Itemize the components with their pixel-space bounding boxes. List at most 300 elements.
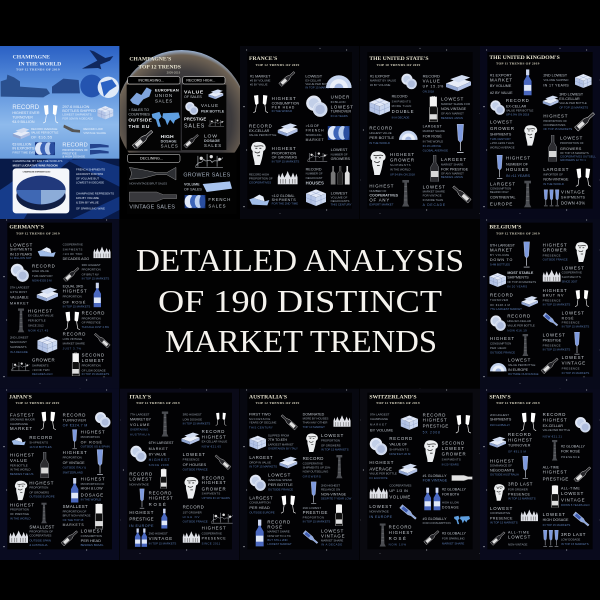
stat: lowest value per bottle: LOWEST: [508, 358, 531, 363]
stat: record highest rose: RECORD: [389, 525, 412, 530]
stat: lowest proportion growers: IN TOP 15 MARKETS: [321, 448, 349, 452]
stat: largest importer: NON-VINTAGE: [543, 177, 569, 181]
panel: italy: [120, 389, 239, 560]
stat: cooperatives: PROPORTION OF: [249, 176, 273, 180]
stat: highest vintage: HIGHEST: [63, 450, 88, 455]
trend: european union sales: [130, 87, 179, 105]
stat: #2 globally: FOR BOTH: [442, 493, 460, 497]
stat: highest cooperative: PRESENCE: [202, 537, 226, 541]
text: champagne exports: 10% BY VOLUME: [76, 196, 99, 200]
stat: highest value: HIGHEST: [10, 453, 35, 458]
panel: champagne in the world: [0, 46, 119, 220]
stat: highest growers: IN TOP 15 MARKETS: [272, 159, 299, 163]
stat: cooperatives up: [370, 484, 412, 500]
trend: low dosage: DOSAGE: [204, 139, 220, 143]
stat: equal 3rd highest: IN TOP 15 MARKETS: [63, 304, 90, 308]
stat: largest consumption: OUTSIDE EUROPE: [249, 511, 275, 515]
stat: lowest consumption: CONSUMPTION: [81, 534, 102, 538]
stat: lowest presence: PRESENCE: [183, 457, 200, 461]
stat: highest cooperatives: OF TOP 15 MARKETS: [543, 127, 572, 131]
stat: #1 export: #2 BY VALUE: [490, 91, 513, 95]
stat: 2nd highest reliance: DESPITE 7-YEAR LOW: [321, 497, 352, 501]
stat: lowest growers: GROWERS: [331, 157, 351, 161]
stat: dominated by houses: THAN ANY OTHER: [303, 421, 327, 425]
stat: record highest prestige: RECORD: [423, 412, 446, 417]
heading: switzerland's: TOP 12 TRENDS OF 2019: [376, 401, 420, 405]
stat: smallest brut: BRUT NON-VINTAGE: [63, 513, 91, 517]
stat: 2nd lowest prestige: PRESTIGE: [303, 510, 328, 515]
stat: lowest growers: [307, 147, 351, 161]
headline: detailed analysis: MARKET TRENDS: [165, 323, 437, 359]
stat: record ex-cellar: [490, 98, 534, 117]
stat: lowest shipments: SHIPMENTS: [10, 248, 33, 252]
stat: lowest growers: LOWEST: [560, 135, 583, 140]
stat: #1 market: #3 BY VOLUME: [250, 78, 270, 82]
stat: grower shipments: <1/3 OF TWO: [32, 368, 50, 372]
stat: 6th largest: BY VOLUME: [490, 253, 509, 257]
stat: highest vintage: [63, 449, 103, 475]
stat: highest grower: SHIPMENTS: [390, 163, 411, 167]
heading: spain's: SPAIN'S: [489, 394, 511, 400]
stat: record average value: RECORD AVERAGE: [31, 127, 57, 131]
stat: cooperative shipments: SHIPMENTS: [63, 247, 83, 251]
stat: 2nd lowest negociant: SHIPMENTS: [10, 345, 27, 349]
stat: record shipments: SHIPMENTS: [392, 99, 411, 103]
stat: dominated by houses: TOP 10 MARKET: [303, 425, 325, 429]
stat: exports: [12, 142, 55, 155]
stat: cooperative shipments: [63, 243, 111, 261]
stat: global shipments: SHIPMENTS: [272, 198, 296, 202]
stat: highest average: IN EUROPE: [369, 476, 388, 480]
stat: highest prestige: HIGHEST: [10, 502, 35, 507]
stat: 3rd last grower: IN TOP 15 MARKETS: [508, 497, 536, 501]
stat: smallest cooperatives: [9, 525, 55, 547]
stat: 6th largest: 6TH LARGEST: [490, 243, 516, 247]
stat: lowest growers: OF TOP 15 MARKETS: [560, 151, 589, 155]
stat: largest rose: LARGEST: [423, 125, 442, 129]
panel: japan: [0, 389, 119, 560]
stat: record high value: THIS CENTURY: [32, 274, 53, 278]
stat: 3rd lowest: VALUE PER BOTTLE: [559, 101, 587, 105]
stat: highest consumption: [490, 334, 528, 356]
stat: second lowest: IN TOP 15 MARKETS: [82, 372, 109, 376]
stat: lowest vintage: IN A DECADE: [321, 543, 342, 547]
stat: lowest non-vintage: OF ANY MARKET: [441, 111, 464, 115]
chart: shipments pie: CHAMPAGNE SHIPMENTS 2019: [23, 170, 50, 173]
stat: vintage shipments: [544, 190, 586, 206]
stat: largest rose: FOR ROSÉ: [423, 133, 442, 138]
stat: 7th largest: OVERTAKING: [130, 428, 148, 432]
stat: cooperative shipments: DECADES AGO: [63, 257, 89, 261]
stat: record ex-cellar: VALUE PER BOTTLE: [543, 428, 570, 432]
trend: high dosage: SALES: [161, 144, 179, 149]
stat: second lowest grower: SHIPMENTS: [442, 457, 461, 461]
stat: record high value: HIGH VALUE: [32, 269, 49, 273]
stat: 3rd last low dosage: [543, 530, 589, 546]
stat: highest cooperatives: COOPERATIVES: [369, 193, 399, 197]
stat: lowest average spend: AVERAGE SPEND: [268, 478, 292, 482]
stat: 2nd lowest volume: [543, 74, 592, 88]
stat: fastest growing: FASTEST: [10, 412, 35, 417]
stat: highest prestige: OF PRESTIGE: [10, 512, 29, 516]
trend: value per bottle: [185, 102, 225, 115]
stat: fastest growing: MARKET: [10, 426, 33, 431]
stat: lowest growers: COOPERATIVES OUTSELL: [560, 155, 596, 159]
stat: highest growers: OF GROWERS: [272, 156, 298, 160]
stat: record cooperative: GROWERS: [303, 475, 321, 479]
stat: smallest cooperatives: OUTSIDE SPAIN: [29, 538, 51, 542]
stat: lowest grower: SHIPMENTS: [490, 132, 512, 136]
trend: high dosage: DOSAGE: [161, 140, 177, 144]
stat: 3rd last grower: [494, 482, 536, 501]
stat: lowest cooperative: [543, 265, 585, 284]
stat: largest drop: LARGEST: [249, 455, 273, 460]
stat: cooperatives up: VOLUME: [389, 495, 411, 500]
stat: largest drop: [249, 455, 297, 469]
stat: largest importer: LARGEST: [543, 167, 569, 172]
icon: globe: [80, 75, 119, 98]
stat: record shipments: 14.5 M BOTTLES: [29, 445, 52, 449]
stat: record per bottle: IN THE WORLD: [369, 141, 390, 145]
stat: highest houses: NUMBER OF: [506, 162, 529, 166]
stat: record high value: NOW €303 5 M: [32, 279, 52, 283]
stat: lowest rose: IN TOP 15 MARKETS: [562, 325, 589, 329]
stat: #1 export: MARKET: [490, 78, 513, 83]
stat: highest rose: HIGHEST: [81, 429, 106, 434]
stat: lowest vintage: FOR VINTAGE: [423, 194, 442, 198]
stat: 6th largest: 9.4M BOTTLES: [490, 262, 510, 266]
stat: 9th largest: MARKET: [370, 422, 388, 426]
stat: record per bottle: PER BOTTLE: [369, 135, 394, 140]
stat: #1 globally vintage: [423, 474, 472, 483]
stat: record ex-cellar: EX-CELLAR: [543, 424, 563, 428]
stat: lowest average spend: LOWEST: [268, 473, 291, 478]
stat: lowest non-vintage: BESIDES JAPAN: [441, 116, 463, 120]
stat: highest grower: GROWER: [390, 157, 415, 162]
headline: detailed analysis: DETAILED ANALYSIS: [136, 242, 464, 278]
stat: record cooperative: NOW OUTSELLING: [303, 470, 328, 474]
stat: cooperatives: [249, 171, 298, 185]
heading: champagne in the world: TOP 12 TRENDS OF 2019: [16, 67, 60, 71]
stat: highest grower presence: GROWER: [543, 247, 567, 252]
stat: high low dosage: PROPORTION OF: [81, 482, 105, 486]
stat: cooperatives up: UP 1/3 IN: [389, 489, 408, 493]
stat: largest consumption: CONSUMPTION: [249, 501, 271, 505]
box: increasing: [128, 77, 180, 84]
stat: bottles shipped: BOTTLES SHIPPED: [62, 109, 96, 113]
stat: highest rose: [72, 429, 110, 449]
stat: record turnover: RECORD: [12, 105, 40, 111]
stat: second lowest grower: [424, 440, 466, 466]
stat: #3 consumption: #3 GLOBALLY: [423, 517, 447, 521]
stat: highest houses: IN >11 YEARS: [506, 174, 531, 178]
stat: lowest grower: LOWEST: [490, 119, 513, 124]
stat: lowest vintage: MARKET SHARE: [423, 189, 445, 193]
stat: lowest consumption: BESIDES BRAZIL: [81, 543, 104, 547]
stat: negociant houses: [306, 166, 350, 185]
box: declining: [128, 154, 180, 162]
stat: highest grower presence: PRESENCE: [543, 253, 561, 257]
stat: record turnover: TURNOVER: [12, 116, 33, 120]
trend: european union sales: UNION: [155, 93, 173, 98]
headline: detailed analysis: [136, 242, 464, 359]
stat: record ex-cellar: EX-CELLAR: [249, 129, 270, 133]
stat: lowest negociants: [306, 189, 352, 207]
heading: the united kingdom's: THE UNITED KINGDOM'S: [489, 55, 560, 61]
stat: record lowest: NON-VINTAGE: [129, 482, 149, 486]
stat: record value: SHIPMENTS: [389, 448, 409, 452]
stat: lowest high dosage: IN TOP 15 MARKETS: [543, 523, 570, 527]
icon: cargo ship: [1, 75, 50, 97]
stat: highest vintage: PROPORTION: [63, 455, 82, 459]
stat: 3rd highest brut nv: 3RD HIGHEST: [82, 263, 101, 267]
stat: highest consumption: HIGHEST: [490, 336, 515, 341]
stat: lowest high dosage: HIGH DOSAGE: [543, 518, 569, 522]
stat: lowest average spend: [250, 473, 293, 492]
stat: 2nd highest shipments: [490, 413, 536, 431]
stat: lowest vintage: VINTAGE: [321, 534, 345, 539]
text: lucrative region: [13, 159, 63, 167]
stat: record shipments: MORE THAN: [392, 104, 412, 108]
stat: highest cooperative: SINCE 2011: [202, 542, 221, 546]
stat: largest prestige: LARGEST: [441, 157, 467, 162]
stat: dominated by houses: DOMINATED: [303, 413, 325, 417]
stat: vintage shipments: SHIPMENTS: [561, 196, 586, 200]
stat: #1 market: #1 MARKET: [250, 74, 271, 78]
stat: largest prestige: BESIDES JAPAN: [441, 175, 463, 179]
stat: lowest cooperative: LOWEST: [562, 265, 585, 270]
stat: grower shipments: DECADES AGO: [32, 372, 53, 376]
heading: champagne's: [129, 56, 181, 75]
stat: lowest vintage: [423, 184, 471, 207]
stat: highest value: IN THE WORLD: [10, 468, 31, 472]
stat: lowest vintage: IN MORE THAN: [423, 198, 443, 202]
stat: lowest vintage: LOWEST: [321, 529, 344, 534]
trend: prestige sales: PRESTIGE: [184, 116, 206, 121]
stat: highest brut nv: [543, 288, 589, 307]
stat: all-time lowest non-vintage: NON-VINTAGE: [508, 542, 528, 546]
stat: #3 consumption: [423, 516, 470, 525]
stat: largest importer: IN THE WORLD: [543, 182, 564, 186]
stat: 2nd highest vintage: 2ND HIGHEST: [149, 531, 168, 535]
stat: lowest growers: [549, 135, 596, 162]
stat: record turnover: €4.9 BILLION: [12, 120, 35, 124]
stat: record high ex-cellar: RECORD: [507, 314, 531, 319]
stat: record value: [423, 74, 471, 93]
stat: largest prestige: MARKET SHARE: [441, 162, 463, 166]
heading: japan's: JAPAN'S: [9, 394, 32, 400]
stat: highest cooperative: COOPERATIVE: [202, 531, 222, 535]
stat: record grower: GROWER: [202, 486, 226, 491]
stat: lowest rose: PRESENCE: [562, 321, 580, 325]
stat: exports: FIRST TIME EVER: [12, 150, 36, 154]
stat: slipped: SLIPPED FROM: [268, 433, 290, 437]
stat: record turnover: [490, 292, 538, 311]
stat: largest consumption: BEHIND ONLY: [490, 190, 509, 194]
heading: italy's: [129, 394, 180, 405]
trend: prestige sales: SALES: [184, 124, 205, 130]
trend: value per bottle: VALUE: [201, 103, 219, 108]
stat: bottles shipped: 297.6 MILLION: [62, 104, 89, 109]
stat: record average value: VALUE PER BOTTLE: [31, 131, 59, 135]
stat: 9th largest: BY VOLUME: [370, 427, 394, 432]
stat: grower shipments: SHIPMENTS: [32, 363, 49, 367]
stat: highest prestige: HIGHEST: [543, 470, 568, 475]
stat: all-time lowest vintage: VINTAGE: [561, 497, 585, 502]
stat: under 3 billion: UNDER: [331, 95, 350, 100]
stat: record turnover: TURNOVER: [63, 419, 86, 423]
stat: record ex-cellar: EX-CELLAR: [506, 105, 527, 109]
stat: record low vintage: RECORD LOW: [83, 127, 103, 131]
stat: highest average: [369, 460, 417, 480]
stat: 2nd highest vintage: VINTAGE: [149, 536, 173, 541]
stat: largest consumption: PER HEAD: [249, 505, 270, 510]
stat: #1 globally vintage: #1 GLOBALLY: [423, 474, 447, 478]
stat: highest growers: [251, 142, 299, 165]
stat: highest prestige: IN THE WORLD: [10, 517, 31, 521]
stat: 6th largest: & 6TH MOST: [10, 290, 27, 294]
stat: cooperative shipments: COOPERATIVE: [63, 243, 83, 247]
stat: highest brut nv: IN TOP 15 MARKETS: [543, 302, 570, 306]
stat: record highest ex-cellar: HIGHEST: [202, 434, 227, 439]
stat: lowest grower: WORLD AVERAGE: [490, 145, 515, 149]
stat: record ex-cellar: VALUE PER BOTTLE: [506, 109, 534, 113]
stat: lowest average spend: PER BOTTLE: [268, 482, 293, 487]
stat: largest consumption: CONSUMPTION: [490, 187, 511, 191]
stat: second lowest grower: LOWEST: [442, 446, 465, 451]
trend: french sales: SALES: [208, 204, 226, 209]
stat: record highest prestige: 5X 2008: [423, 430, 441, 434]
box: record high: RECORD HIGH...: [186, 79, 215, 83]
stat: 2nd highest shipments: 2ND HIGHEST: [490, 413, 509, 417]
heading: champagne in the world: [13, 55, 61, 71]
heading: champagne in the world: IN THE WORLD: [18, 62, 61, 68]
stat: record cooperative: [303, 455, 343, 479]
stat: highest ex-cellar: HIGHEST: [28, 308, 53, 313]
stat: lowest prestige: PRESENCE: [543, 344, 561, 348]
stat: smallest cooperatives: PROPORTION OF: [29, 530, 53, 534]
stat: 3rd highest brut nv: IN TOP 15 MARKETS: [82, 277, 109, 281]
stat: record turnover: HIGHEST: [508, 437, 533, 442]
trend: vintage sales: [129, 192, 177, 211]
stat: 7th largest: [130, 411, 168, 437]
stat: 2nd highest shipments: SHIPMENTS: [490, 417, 512, 421]
stat: 2nd lowest volume: VOLUME SHIPPED: [543, 78, 568, 82]
stat: record cooperative: SHIPMENTS UP 25%: [303, 465, 331, 469]
stat: fastest growing: CHAMPAGNE: [10, 422, 28, 426]
stat: negociant houses: HOUSES: [306, 180, 324, 185]
stat: lowest vintage: MARKET SHARE: [321, 539, 343, 543]
heading: australia's: TOP 12 TRENDS OF 2019: [256, 401, 300, 405]
stat: lowest shipments: IN 10 YEARS: [10, 252, 33, 256]
panel: the united kingdom: [480, 46, 600, 220]
stat: lowest cooperative: PRESENCE: [490, 516, 513, 520]
stat: highest grower presence: [543, 242, 588, 262]
stat: highest ex-cellar: SINCE 2012: [28, 323, 44, 327]
stat: #3 sparkling: MARKET SHARE: [442, 541, 464, 545]
stat: lowest negociants: VOLUME OF: [331, 195, 348, 199]
stat: french market: >1/3 OF: [306, 124, 320, 128]
stat: highest growers: PROPORTION: [272, 151, 297, 155]
stat: #2 globally: HIGH & LOW: [442, 500, 459, 504]
stat: record turnover: OF €324.7 M: [63, 423, 88, 427]
stat: record turnover: OF €91.5 M: [508, 450, 527, 454]
stat: slipped: [249, 433, 298, 451]
stat: grower shipments: [11, 358, 55, 376]
stat: second lowest: SECOND: [82, 353, 105, 358]
stat: highest cooperatives: [543, 111, 596, 131]
stat: record turnover: HIGHEST EVER: [12, 111, 40, 115]
stat: record prestige: [65, 311, 109, 330]
trend: volume of sales: OF SALES: [184, 187, 202, 191]
box: record high: [183, 77, 225, 84]
stat: 3rd last grower: PRESENCE: [508, 493, 531, 497]
stat: lowest consumption: LOWEST: [81, 529, 104, 534]
stat: record lowest: LOWEST: [129, 477, 152, 482]
stat: highest cooperatives: PROPORTION OF: [543, 119, 567, 123]
heading: the united kingdom's: [489, 55, 560, 66]
stat: exports: €3 BILLION: [12, 142, 32, 146]
stat: #2 rose: [552, 440, 585, 461]
stat: exports: IN EXPORTS: [12, 147, 35, 151]
stat: second lowest: PROPORTION: [82, 364, 101, 368]
stat: lowest grower: +15% LESS THAN: [490, 141, 514, 145]
stat: lowest consumption: PER HEAD: [81, 538, 101, 543]
stat: lowest presence: OUTSIDE FRANCE: [183, 467, 208, 471]
trend: low dosage: LOW: [204, 134, 218, 140]
icon: plane: [82, 50, 113, 69]
stat: record growers: [183, 504, 233, 523]
stat: record low vintage: MARKET SHARE: [63, 341, 85, 345]
stat: lowest growers: GROWERS: [560, 147, 582, 151]
stat: lowest vintage: VINTAGE: [562, 360, 586, 365]
text: lucrative region: MOST LUCRATIVE WINE REGION: [13, 163, 58, 167]
stat: 3rd last grower: 3RD LAST: [508, 482, 533, 487]
heading: germany's: [9, 225, 60, 235]
stat: under 3 billion: €3 BILLION: [331, 100, 345, 104]
heading: france's: [249, 56, 300, 67]
stat: record grower: [184, 475, 230, 500]
trend: vintage sales: VINTAGE SALES: [129, 205, 175, 211]
heading: japan's: TOP 12 TRENDS OF 2019: [16, 401, 60, 405]
heading: japan's: [9, 394, 60, 405]
stat: record highest prestige: PRESTIGE: [423, 424, 449, 429]
stat: highest cooperatives: NUMBER OF: [369, 189, 387, 193]
stat: first two successive: SUCCESSIVE: [249, 417, 271, 421]
stat: highest growers: OF GROWERS: [29, 490, 49, 494]
stat: under 3 billion: [306, 95, 354, 118]
stat: #2 globally: [424, 488, 466, 510]
stat: most stable: IN 20 YEARS: [507, 285, 527, 289]
stat: second lowest grower: SECOND: [442, 441, 465, 446]
stat: second lowest: LOWEST: [82, 358, 105, 363]
stat: lowest cooperative: COOPERATIVE: [562, 270, 582, 274]
heading: germany's: GERMANY'S: [9, 225, 44, 231]
stat: record average value: OF €16.55: [31, 136, 52, 140]
trend: prestige sales: [184, 116, 224, 130]
stat: lowest presence: LOWEST: [183, 452, 206, 457]
stat: dominated by houses: [303, 413, 351, 429]
stat: lowest value per bottle: OUTSIDE OUR RANGE: [508, 372, 539, 376]
stat: 2nd lowest prestige: [303, 504, 342, 526]
stat: lowest cooperative: LOWEST: [490, 506, 513, 511]
stat: fastest growing: GROWING MAJOR: [10, 418, 35, 422]
stat: lowest grower: [490, 119, 537, 149]
stat: highest negociants: DOMINANCE OF: [490, 464, 512, 468]
stat: highest grower: HIGHEST: [390, 152, 415, 157]
stat: highest cooperatives: [369, 180, 409, 207]
stat: highest rose: OUTSIDE US & SPAIN: [81, 445, 110, 449]
